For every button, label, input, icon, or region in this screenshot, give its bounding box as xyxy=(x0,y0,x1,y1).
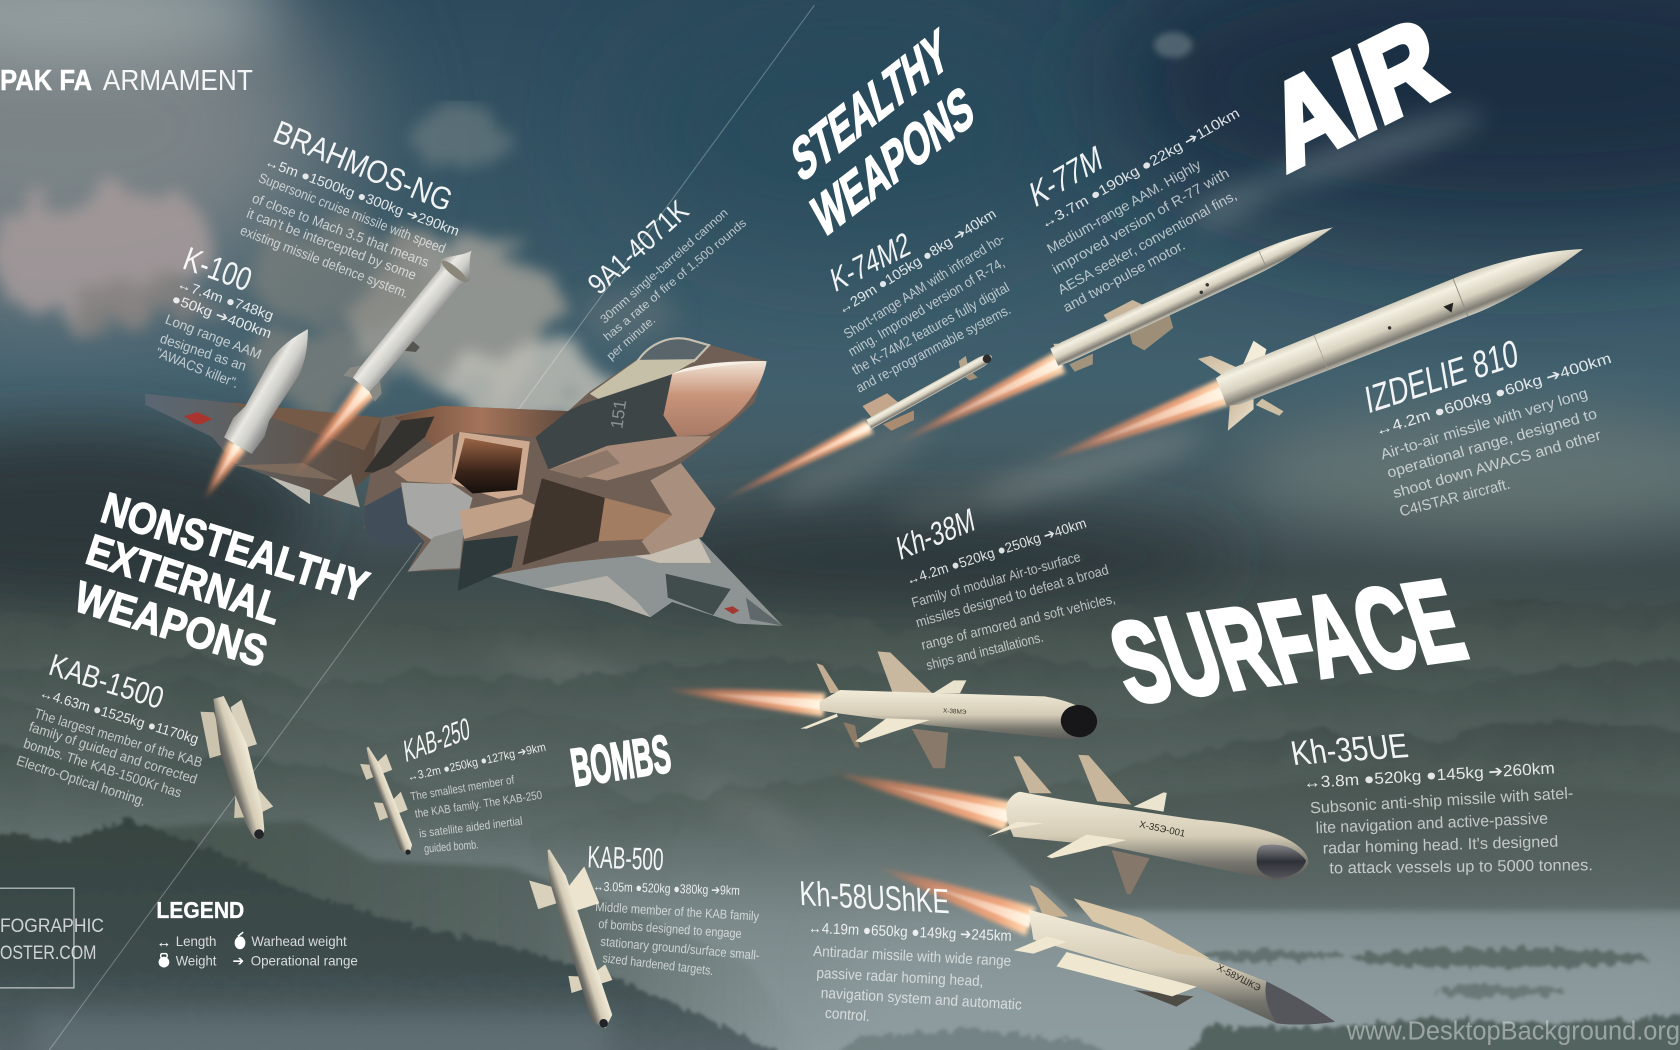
text block: Kh-35UE: ↔3.8m ●520kg ●145kg ➔260km xyxy=(1303,759,1555,792)
logo: infographic poster: OSTER.COM xyxy=(0,943,96,964)
text block: K-77M: K-77M xyxy=(1026,138,1106,216)
fuselage base xyxy=(364,337,767,591)
clouds xyxy=(0,118,1276,419)
text block: Izdelie 810: shoot down AWACS and other xyxy=(1391,427,1603,502)
title: ARMAMENT xyxy=(103,65,253,97)
bomb: KAB-250 xyxy=(354,742,423,861)
nose cone xyxy=(663,361,767,436)
diagonal divider line xyxy=(49,5,814,1050)
exhaust plumes xyxy=(195,352,1229,936)
text block: BrahMos-NG: ↔5m ●1500kg ●300kg ➔290km xyxy=(263,153,462,239)
text block: K-77M: Medium-range AAM. Highly xyxy=(1044,156,1204,257)
text block: Kh-35UE: Subsonic anti-ship missile with satel- xyxy=(1310,784,1574,817)
icon: length: ↔ xyxy=(156,934,171,951)
heading: nonstealthy external weapons xyxy=(69,483,374,677)
text block: K-100 xyxy=(153,241,276,391)
text block: K-74M2: Short-range AAM with infrared ho- xyxy=(840,230,1008,342)
legend: Warhead weight xyxy=(251,933,347,949)
missile: Kh-35UE: Х-35Э-001 xyxy=(1138,819,1186,840)
legend heading: LEGEND xyxy=(156,897,244,923)
heading: stealthy weapons xyxy=(786,16,980,251)
missile: Kh-38M: Х-38МЭ xyxy=(943,708,967,716)
missile: K-77M xyxy=(1050,218,1338,372)
icon: warhead weight xyxy=(235,932,245,949)
text block: Izdelie 810: ↔4.2m ●600kg ●60kg ➔400km xyxy=(1373,350,1613,440)
text block: Kh-58UShKE: passive radar homing head, xyxy=(816,965,984,990)
text block: K-74M2: and re-programmable systems. xyxy=(853,301,1013,395)
text block: K-74M2: ↔29m ●105kg ●8kg ➔40km xyxy=(835,205,999,317)
text block: Izdelie 810: IZDELIE 810 xyxy=(1362,331,1521,421)
canopy xyxy=(637,338,709,361)
text block: Izdelie 810: C4ISTAR aircraft. xyxy=(1398,476,1512,520)
text block: KAB-1500 xyxy=(15,647,204,809)
heading: bombs: BOMBS xyxy=(567,725,675,798)
missile: K-74M2 xyxy=(862,345,997,435)
smoke trails xyxy=(481,408,1211,856)
text block: Kh-58UShKE xyxy=(799,875,1023,1025)
right wing xyxy=(490,537,783,626)
icon: weight xyxy=(159,954,169,968)
text block: BrahMos-NG: of close to Mach 3.5 that means xyxy=(250,190,431,270)
text block: KAB-250: guided bomb. xyxy=(424,838,479,856)
text block: KAB-250: The smallest member of xyxy=(409,773,516,804)
text block: K-77M: ↔3.7m ●190kg ●22kg ➔110km xyxy=(1037,105,1242,232)
air intake xyxy=(451,432,530,499)
legend: Operational range xyxy=(251,952,358,968)
logo: infographic poster xyxy=(0,888,104,988)
text block: K-100: K-100 xyxy=(178,241,256,299)
text block: Kh-38M: range of armored and soft vehicles, xyxy=(920,590,1117,653)
text block: KAB-500: Middle member of the KAB family xyxy=(595,899,760,924)
missile: Izdelie 810 xyxy=(1198,230,1591,431)
weapons bay xyxy=(457,463,715,591)
text block: Kh-35UE: Kh-35UE xyxy=(1288,727,1411,773)
missile: BrahMos-NG xyxy=(343,238,488,402)
text block: 9A1-4071K: 9A1-4071K xyxy=(582,195,695,301)
text block: Kh-38M: Family of modular Air-to-surface xyxy=(910,548,1082,610)
text block: 9A1-4071K: has a rate of fire of 1,500 rounds xyxy=(601,216,749,344)
text block: KAB-500: sized hardened targets. xyxy=(602,950,714,978)
text block: Izdelie 810: operational range, designed to xyxy=(1385,405,1599,482)
missile: Kh-38M xyxy=(800,651,1099,768)
text block: Kh-38M: ↔4.2m ●520kg ●250kg ➔40km xyxy=(904,515,1088,588)
text block: 9A1-4071K xyxy=(582,195,749,363)
heading: stealthy weapons: WEAPONS xyxy=(805,73,980,251)
text block: Kh-38M: ships and installations. xyxy=(925,629,1045,673)
text block: KAB-1500: KAB-1500 xyxy=(45,647,168,716)
text block: K-77M xyxy=(1026,105,1242,315)
left wing xyxy=(145,394,382,507)
text block: KAB-1500: family of guided and corrected xyxy=(27,718,199,787)
text block: BrahMos-NG: BRAHMOS-NG xyxy=(268,114,458,218)
text block: BrahMos-NG: Supersonic cruise missile with speed xyxy=(256,169,448,256)
legend: Length xyxy=(176,933,216,949)
text block: K-100: designed as an xyxy=(158,330,249,374)
text block: KAB-1500: bombs. The KAB-1500Kr has xyxy=(22,735,184,801)
missile: K-100 xyxy=(222,320,324,455)
text block: K-74M2: the K-74M2 features fully digital xyxy=(849,279,1012,378)
text block: Kh-58UShKE: control. xyxy=(824,1005,871,1025)
text block: KAB-500: stationary ground/surface small- xyxy=(600,934,760,963)
forward fuselage xyxy=(590,359,698,400)
text block: KAB-1500: Electro-Optical homing. xyxy=(15,752,148,809)
text block: Kh-38M: Kh-38M xyxy=(894,501,978,567)
text block: K-77M: and two-pulse motor. xyxy=(1060,237,1188,315)
text block: K-74M2: ming. Improved version of R-74, xyxy=(845,254,1007,359)
text block: Kh-38M: missiles designed to defeat a broad xyxy=(914,561,1110,630)
text block: KAB-500: KAB-500 xyxy=(587,839,664,877)
text block: Kh-35UE: to attack vessels up to 5000 tonnes. xyxy=(1329,856,1593,877)
text block: K-100: ↔7.4m ●748kg xyxy=(175,275,276,323)
text block: Kh-35UE: lite navigation and active-passive xyxy=(1315,809,1548,837)
text block: 9A1-4071K: per minute. xyxy=(604,314,658,363)
upper center wing xyxy=(395,406,568,446)
text block: 9A1-4071K: 30mm single-barreled cannon xyxy=(598,206,731,326)
text block: Kh-35UE: radar homing head. It's designed xyxy=(1322,833,1559,858)
heading: nonstealthy external weapons: WEAPONS xyxy=(69,572,273,677)
title xyxy=(0,65,253,97)
watermark: www.DesktopBackground.org xyxy=(1346,1017,1680,1045)
text block: K-100: "AWACS killer". xyxy=(153,344,241,391)
text block: KAB-500: ↔3.05m ●520kg ●380kg ➔9km xyxy=(593,879,740,898)
text block: Kh-58UShKE: ↔4.19m ●650kg ●149kg ➔245km xyxy=(808,920,1012,945)
icon: operational range: ➔ xyxy=(232,952,244,968)
text block: Izdelie 810: Air-to-air missile with very long xyxy=(1379,385,1590,463)
text block: K-100: Long range AAM xyxy=(163,311,264,362)
legend xyxy=(156,897,358,968)
text block: BrahMos-NG: existing missile defence system. xyxy=(238,222,411,301)
missile: Kh-58UShKE xyxy=(1014,885,1335,1025)
fighter jet: 151 xyxy=(606,398,630,430)
text block: K-77M: AESA seeker, conventional fins, xyxy=(1055,187,1239,297)
text block: K-74M2 xyxy=(827,205,1013,395)
text block: KAB-500 xyxy=(587,839,760,978)
text block: Kh-38M xyxy=(894,501,1117,673)
text block: KAB-250 xyxy=(402,711,547,856)
title: PAK FA xyxy=(0,65,92,97)
fighter jet xyxy=(145,337,783,626)
text block: KAB-1500: ↔4.63m ●1525kg ●1170kg xyxy=(38,684,201,747)
bomb: KAB-1500 xyxy=(194,691,283,846)
text block: Kh-58UShKE: Antiradar missile with wide range xyxy=(813,943,1012,970)
text block: KAB-1500: The largest member of the KAB xyxy=(33,705,204,770)
text block: KAB-500: of bombs designed to engage xyxy=(598,916,742,941)
mountain layers xyxy=(0,596,1680,1050)
engine nacelle xyxy=(364,483,473,572)
text block: Izdelie 810 xyxy=(1362,331,1613,520)
text block: BrahMos-NG xyxy=(238,114,462,301)
text block: K-77M: improved version of R-77 with xyxy=(1049,165,1232,277)
missile: Kh-35UE xyxy=(987,755,1308,895)
legend: Weight xyxy=(176,952,217,968)
text block: K-100: ●50kg ➔400km xyxy=(170,290,274,341)
missile: Kh-58UShKE: Х-58УШКЭ xyxy=(1215,963,1262,994)
text block: BrahMos-NG: it can't be intercepted by some xyxy=(245,205,419,283)
heading: nonstealthy external weapons: EXTERNAL xyxy=(80,525,287,634)
text block: KAB-250: the KAB family. The KAB-250 xyxy=(414,789,543,821)
text block: KAB-250: KAB-250 xyxy=(402,711,472,769)
heading: surface: SURFACE xyxy=(1096,555,1479,727)
text block: KAB-250: ↔3.2m ●250kg ●127kg ➔9km xyxy=(406,741,547,784)
heading: nonstealthy external weapons: NONSTEALTHY xyxy=(96,483,374,612)
bomb: KAB-500 xyxy=(522,840,636,1037)
text block: K-74M2: K-74M2 xyxy=(827,225,914,299)
logo: infographic poster: FOGRAPHIC xyxy=(0,916,104,937)
text block: KAB-250: is satellite aided inertial xyxy=(418,815,523,840)
text block: Kh-58UShKE: Kh-58UShKE xyxy=(799,875,950,921)
text block: Kh-35UE xyxy=(1288,727,1593,877)
text block: Kh-58UShKE: navigation system and automatic xyxy=(820,985,1023,1014)
